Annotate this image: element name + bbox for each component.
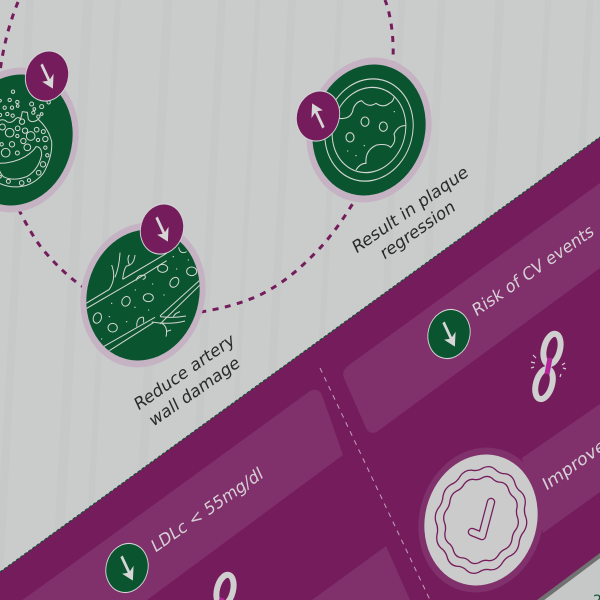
divider dashes [320, 368, 430, 600]
text: LDLc below 55 mg/dl: LDLc < 55mg/dl [148, 463, 266, 557]
panel: purple outcomes sheet [0, 137, 600, 600]
band: improved outcomes [522, 404, 600, 533]
panel: lower-right grey sheet [537, 553, 600, 600]
label: reduce artery wall damage: wall damage [146, 352, 242, 431]
icon: down arrow badge, risk [420, 300, 478, 368]
label: reduce artery wall damage: Reduce artery [131, 329, 237, 415]
effect: plaque regression circle [285, 30, 453, 230]
icon: foam cell with bubbles [0, 90, 52, 187]
label: result in plaque regression: regression [377, 195, 458, 264]
badge: up arrow [289, 81, 347, 151]
text: risk of CV events: Risk of CV events [469, 220, 597, 321]
band: lower left panel [312, 546, 410, 600]
badge: down arrow [18, 41, 76, 111]
effect: lipid-laden cell circle [0, 50, 78, 212]
band: LDLc target [0, 390, 343, 600]
dashed ring connecting the three effects [0, 0, 393, 314]
icon: broken chain, risk [531, 332, 566, 401]
icon: artery with branches [85, 247, 200, 351]
label: result in plaque regression: Result in plaque [349, 161, 471, 258]
icon: certificate check seal [397, 420, 565, 600]
effect: artery wall circle [80, 204, 206, 368]
icon: down arrow badge, LDLc [98, 534, 156, 600]
badge: down arrow [133, 194, 191, 264]
band: risk of CV events [343, 183, 600, 433]
icon: broken chain, LDLc [213, 573, 237, 600]
icon: vessel cross-section with plaque [309, 59, 429, 201]
